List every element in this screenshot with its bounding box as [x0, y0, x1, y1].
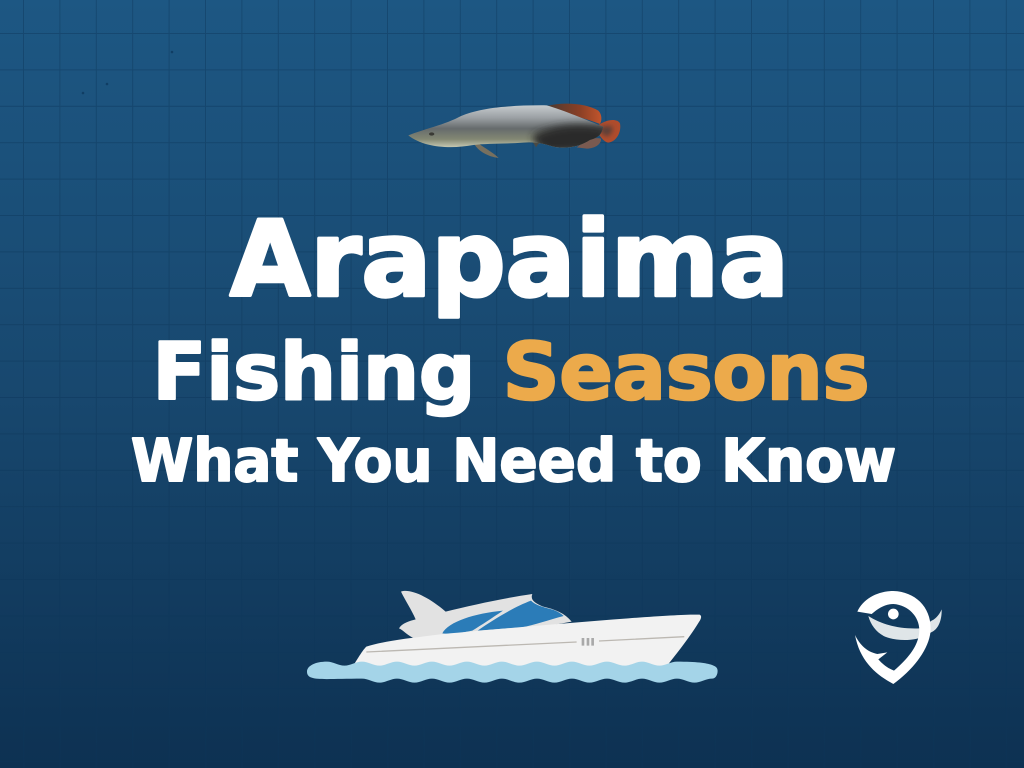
flybridge: [399, 591, 572, 642]
logo eye: [888, 609, 899, 619]
vents: [583, 638, 593, 646]
subheading: What You Need to Know: [131, 427, 896, 495]
dark belly: [533, 125, 610, 153]
water: [307, 662, 718, 683]
icon: boat on water: [307, 591, 718, 683]
anal fin: [577, 138, 601, 149]
eye: [429, 132, 434, 136]
tail fin: [596, 120, 620, 143]
logo band: [868, 609, 942, 640]
pectoral fin: [475, 144, 499, 158]
logo outline: [855, 591, 931, 684]
hull stripe: [366, 637, 684, 652]
icon: arapaima fish: [408, 104, 620, 158]
icon: logo fish hook: [855, 591, 942, 684]
body: [408, 105, 603, 148]
side window: [442, 611, 503, 634]
ventral fin: [533, 141, 544, 147]
hull: [352, 615, 701, 668]
title: Arapaima: Arapaima: [230, 198, 789, 320]
tail fin centre: [598, 126, 613, 137]
heading: Fishing Seasons: Fishing Seasons: [152, 328, 870, 418]
windshield: [478, 601, 564, 631]
dorsal fin: [547, 104, 601, 124]
